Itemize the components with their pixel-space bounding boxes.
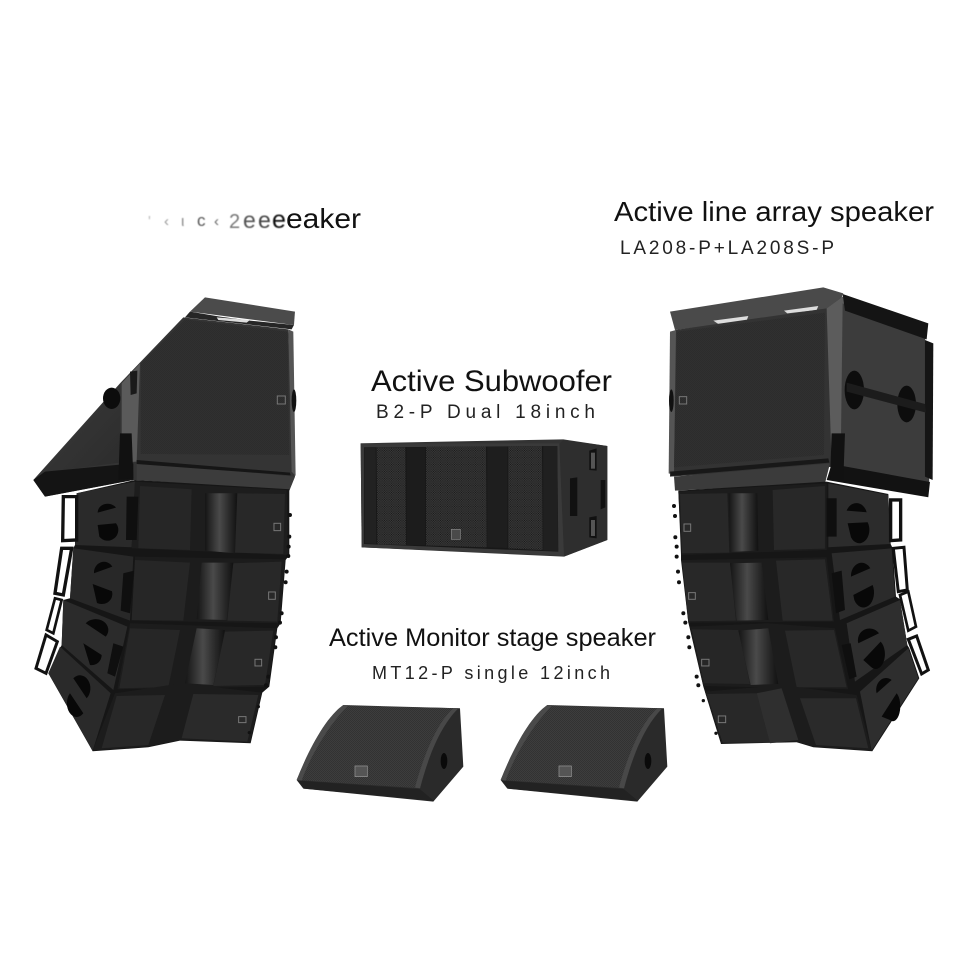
array silhouette backing [48,480,289,751]
heading: active subwoofer: Active Subwoofer [371,365,612,398]
left line array speaker stack [33,297,296,751]
right line array speaker stack [669,287,933,751]
heading: garbled speaker title, left: ' [148,213,151,230]
box 1 [63,482,288,555]
heading: garbled speaker title, left [148,203,361,234]
stage monitor left [297,705,463,802]
box 2 [682,547,907,623]
stage monitor right [501,705,667,802]
subwoofer B2-P [361,439,607,557]
box 4 [36,635,262,751]
heading: garbled speaker title, left: ‹ [214,213,219,230]
box 2 [55,548,285,623]
heading: garbled speaker title, left: ι [181,213,184,230]
model label: LA208: LA208-P+LA208S-P [620,238,834,259]
heading: garbled speaker title, left: e [272,206,286,234]
heading: garbled speaker title, left: c [197,211,206,230]
box 3 [47,598,277,690]
array silhouette backing [678,482,919,751]
heading: garbled speaker title, left: 2 [229,211,240,233]
heading: garbled speaker title, left: e [258,207,271,233]
box 1 [678,483,901,555]
heading: garbled speaker title, left: eaker [286,203,361,234]
heading: active monitor stage speaker: Active Monitor stage speaker [329,624,656,652]
box 4 [705,636,928,751]
box 3 [690,592,916,689]
heading: active line array speaker: Active line array speaker [614,196,934,227]
model label: MT12-P: MT12-P single 12inch [372,663,610,683]
hardware pins [672,504,718,735]
heading: garbled speaker title, left: e [243,207,256,233]
heading: garbled speaker title, left: ‹ [164,213,169,230]
hardware pins [248,513,292,734]
model label: B2-P: B2-P Dual 18inch [376,402,595,423]
